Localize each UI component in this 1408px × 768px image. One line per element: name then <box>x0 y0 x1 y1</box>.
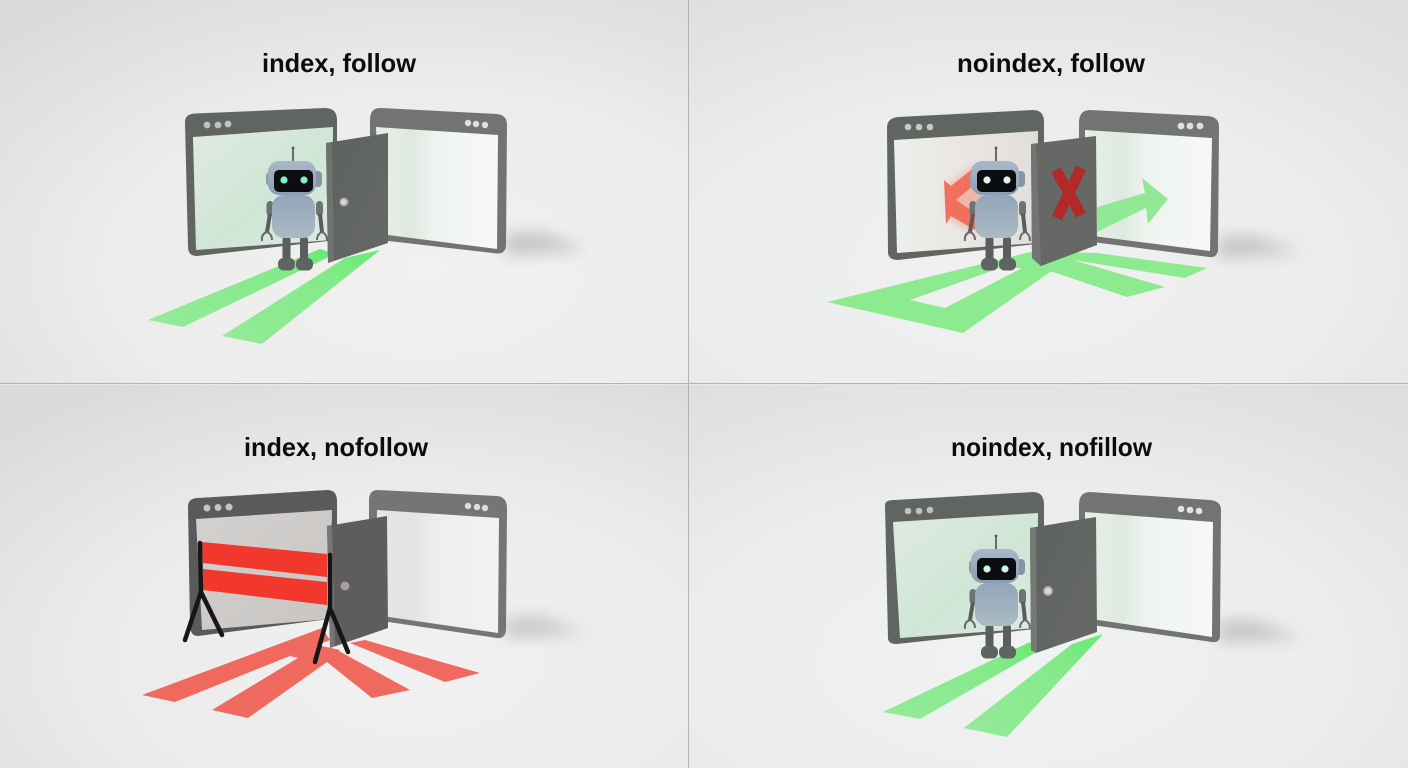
robot crawler <box>965 535 1030 658</box>
floor path: two green paths <box>883 634 1103 737</box>
panel: index, follow <box>0 0 688 384</box>
browser window: left, not indexed <box>885 492 1044 644</box>
browser window: right, linked page <box>370 108 507 254</box>
heading: index, follow: index, follow <box>262 48 417 78</box>
panel: index, nofollow <box>0 385 688 768</box>
panel: noindex, follow <box>689 0 1408 384</box>
open door <box>326 133 388 263</box>
window cast shadow <box>505 616 585 638</box>
window cast shadow <box>1218 236 1302 258</box>
window cast shadow <box>1219 620 1302 642</box>
floor path: green crawl paths <box>827 252 1207 333</box>
heading: noindex, nofillow: noindex, nofillow <box>951 432 1153 462</box>
browser window: right, followed link <box>1079 110 1219 257</box>
robot crawler <box>262 147 327 270</box>
browser window: left, indexed <box>188 490 337 636</box>
panel: noindex, nofollow <box>689 385 1408 768</box>
browser window: left, not indexed <box>887 110 1044 260</box>
barrier: red barricade <box>185 542 348 662</box>
heading: index, nofollow: index, nofollow <box>244 432 429 462</box>
icon: red X <box>1056 168 1081 218</box>
arrow: red blocked index arrow <box>944 165 985 232</box>
robot crawler <box>965 147 1030 270</box>
floor path: two green crawl paths <box>148 249 380 344</box>
browser window: right, linked page <box>369 490 507 638</box>
floor path: red blocked paths <box>142 628 480 718</box>
browser window: left, indexed <box>185 108 337 256</box>
open door <box>1030 517 1097 653</box>
window cast shadow <box>505 232 588 255</box>
open door <box>327 516 388 648</box>
heading: noindex, follow: noindex, follow <box>957 48 1146 78</box>
door with X <box>1031 136 1097 266</box>
arrow: green follow arrow <box>1097 178 1168 232</box>
browser window: right, linked page <box>1079 492 1221 642</box>
